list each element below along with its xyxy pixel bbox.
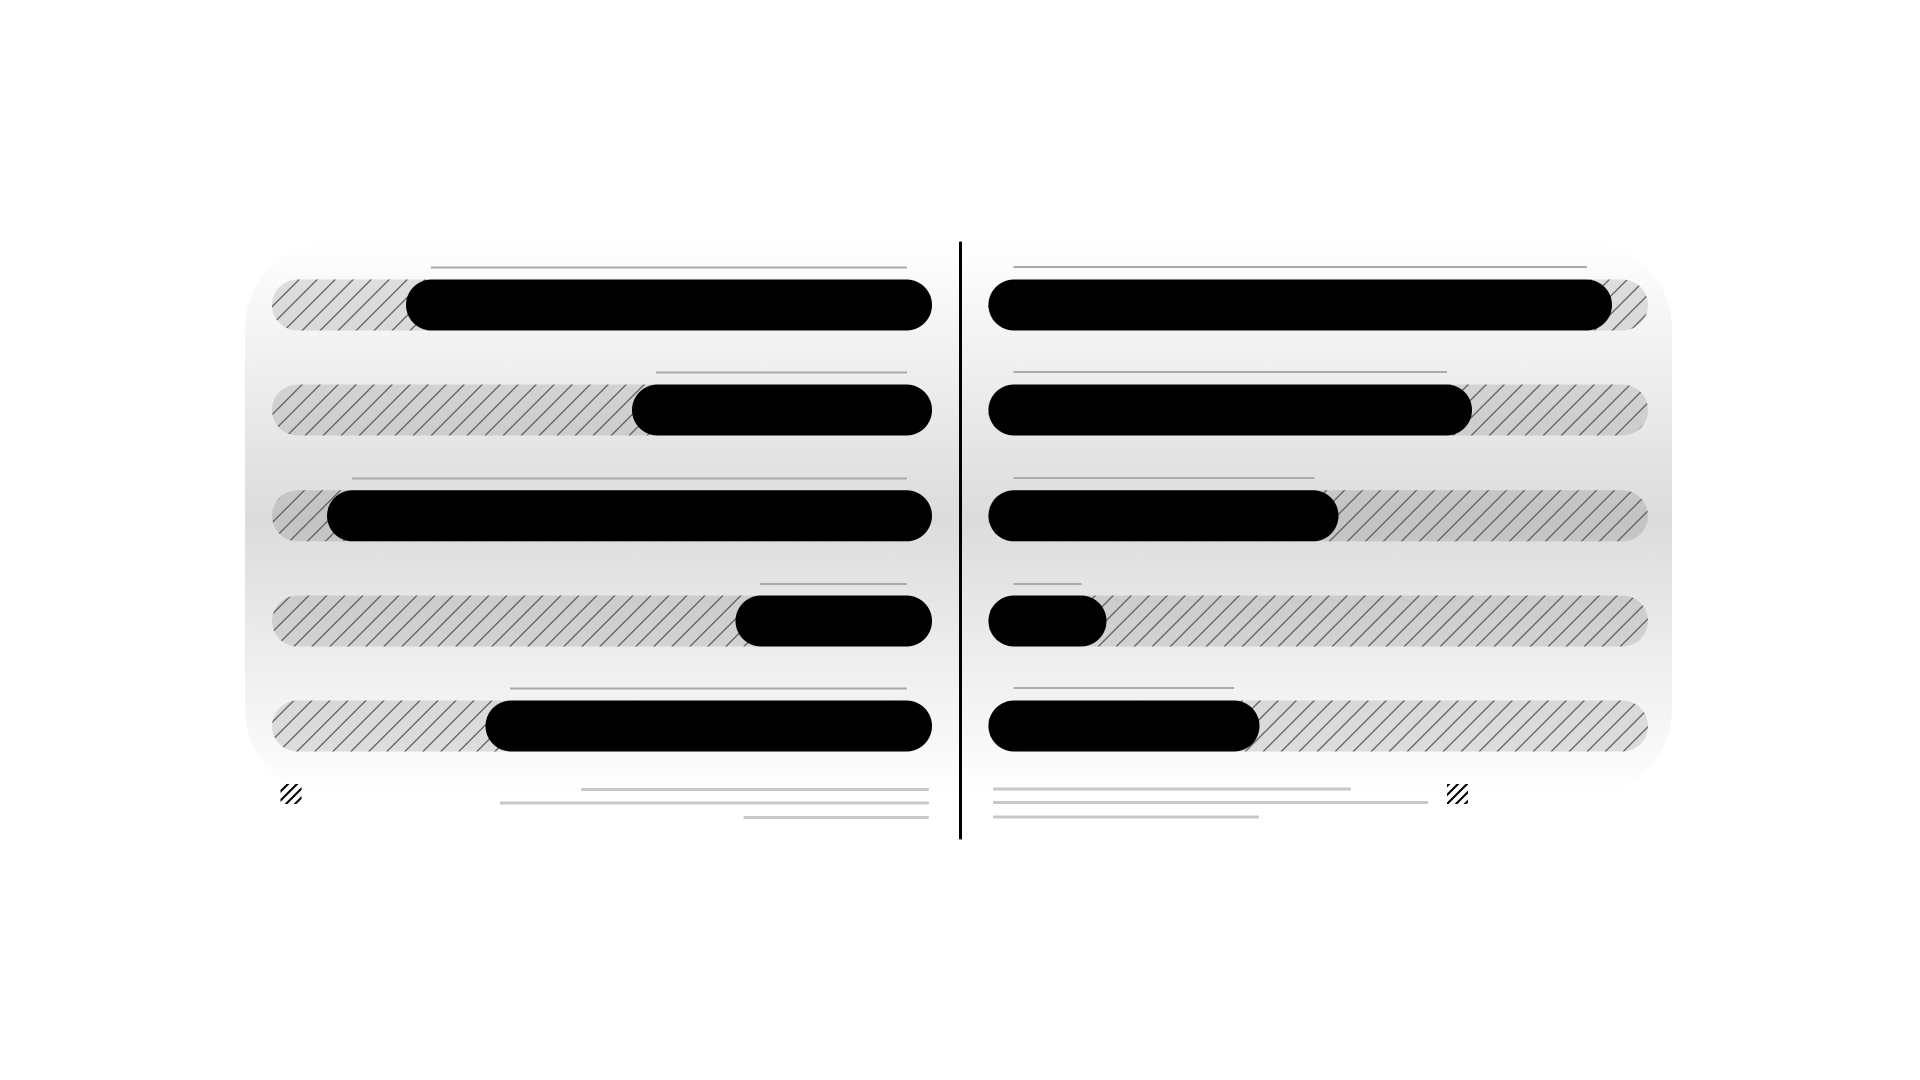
left row 5 xyxy=(272,688,932,752)
left row 3 xyxy=(272,478,932,541)
panel: right bars xyxy=(988,266,1648,752)
right row 4 xyxy=(988,583,1648,646)
left row 2 xyxy=(272,372,932,436)
legend: left hatch swatch xyxy=(280,784,302,804)
panel: left bars xyxy=(272,266,932,752)
legend: right hatch swatch xyxy=(1447,784,1468,804)
right row 1 xyxy=(988,266,1648,330)
panel: gradient background xyxy=(245,241,1672,797)
right row 3 xyxy=(988,477,1648,541)
note: left placeholder lines xyxy=(500,788,929,819)
right row 5 xyxy=(988,687,1648,752)
center divider xyxy=(959,242,962,840)
left row 1 xyxy=(272,266,932,330)
right row 2 xyxy=(988,371,1648,436)
note: right placeholder lines xyxy=(993,788,1428,818)
left row 4 xyxy=(272,583,932,646)
